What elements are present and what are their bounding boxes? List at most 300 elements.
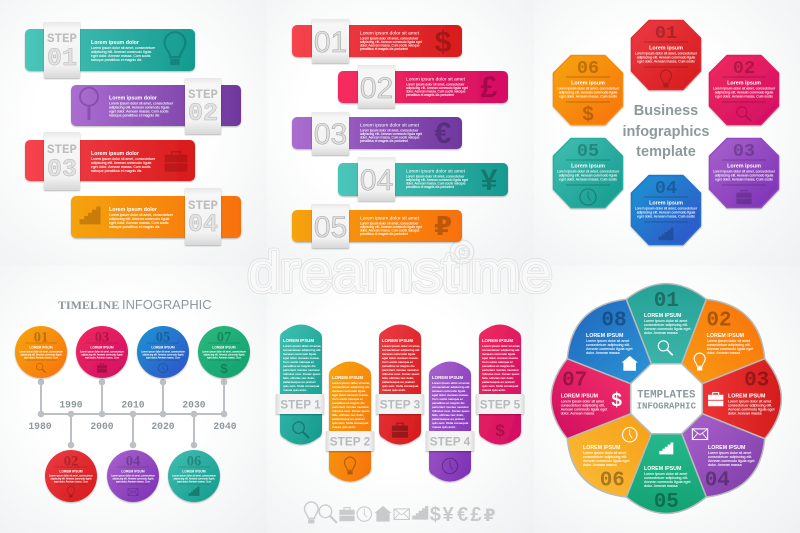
circle 05: 05 xyxy=(156,330,170,346)
segment 02 xyxy=(682,299,765,384)
segment 08: Aenean commodo ligula eget xyxy=(586,347,633,351)
octagon 03: eget dolor. Aenean massa. Cum sociis xyxy=(715,177,773,181)
octagon 04: 04 xyxy=(655,178,677,199)
pillar step 1: consectetuer adipiscing elit. xyxy=(283,348,321,352)
octagon 06: Lorem ipsum dolor sit amet, consectetuer xyxy=(557,86,620,90)
segment 07: dolor. Aenean massa xyxy=(561,412,594,416)
banner: 03 euro: € xyxy=(435,117,452,150)
banner: 01 dollar: penatibus et magnis dis parturient xyxy=(360,47,408,51)
pillar step 5: LOREM IPSUM xyxy=(482,338,513,343)
octagon 04: Lorem ipsum dolor sit amet, consectetuer xyxy=(635,206,698,210)
banner: 01 dollar: adipiscing elit. Aenean commodo ligula eget xyxy=(360,40,422,44)
octagon 03: Lorem ipsum xyxy=(727,164,761,170)
panel: step pillars xyxy=(276,324,524,526)
timeline axis xyxy=(38,379,227,448)
banner: step 2: STEP xyxy=(188,88,218,102)
title xyxy=(58,297,212,312)
segment 06: Aenean commodo ligula eget xyxy=(583,459,630,463)
octagon 06: 06 xyxy=(577,58,599,79)
octagon 02: Lorem ipsum dolor sit amet, consectetuer xyxy=(713,86,776,90)
segment 03: LOREM IPSUM xyxy=(728,394,766,400)
pillar step 5: penatibus et magnis dis xyxy=(482,364,515,368)
segment 06: 06 xyxy=(600,470,625,492)
segment 04: dolor. Aenean massa xyxy=(708,463,742,467)
banner: 02 pound: adipiscing elit. Aenean commodo ligula eget xyxy=(406,86,468,90)
pillar step 5: pellentesque eu pretium xyxy=(482,380,515,384)
segment 01: LOREM IPSUM xyxy=(644,313,682,319)
pillar step 1: Lorem ipsum dolor sit amet, xyxy=(283,344,321,348)
segment 02: Aenean commodo ligula eget xyxy=(707,347,753,351)
banner: 01 dollar: $ xyxy=(435,26,452,59)
banner: step 4: 04 xyxy=(188,210,218,239)
circle 06: adipiscing elit. Aenean commodo ligula xyxy=(173,478,215,480)
banner: 02 pound: Lorem ipsum dolor sit amet xyxy=(406,76,466,82)
banner: 04 yen: ¥ xyxy=(481,164,498,197)
circle 06: Lorem ipsum dolor sit amet, consectetuer xyxy=(172,474,216,478)
circle 04: LOREM IPSUM xyxy=(121,470,145,474)
segment 07: $ xyxy=(611,390,622,411)
segment 08: consectetuer adipiscing elit. xyxy=(586,343,630,347)
heading: business infographics template: infographics xyxy=(622,124,710,140)
pillar step 5: felis, ultricies nec dolor, xyxy=(482,376,514,380)
segment 06: Lorem ipsum dolor sit amet xyxy=(583,451,626,455)
pillar step 2: STEP 2 xyxy=(330,434,371,448)
year labels: 2010 xyxy=(121,400,145,410)
pillar step 4 xyxy=(426,362,474,482)
banner: 03 euro: dolor. Aenean massa. Cum sociis natoque xyxy=(360,136,420,140)
pillar step 4: Aenean commodo ligula xyxy=(432,389,465,393)
banner: step 3: STEP xyxy=(47,143,77,157)
segment 08: Lorem ipsum dolor sit amet xyxy=(586,339,629,343)
pillar step 5 xyxy=(476,324,524,444)
octagon 05: eget dolor. Aenean massa. Cum sociis xyxy=(559,177,617,181)
title: INFOGRAPHIC xyxy=(122,297,212,312)
pillar step 2: LOREM IPSUM xyxy=(332,375,363,380)
pillar step 2: Aenean commodo ligula xyxy=(332,389,365,393)
banner: step 2: 02 xyxy=(188,99,218,128)
segment 07 xyxy=(551,359,631,439)
banner: step 1: STEP xyxy=(47,32,77,46)
banner: 03 euro xyxy=(292,112,462,155)
year labels: 2040 xyxy=(213,421,237,432)
pillar step 5: quis sem. Nulla consequat xyxy=(482,384,518,388)
octagon 01: eget dolor. Aenean massa. Cum sociis xyxy=(637,59,695,63)
banner: 01 dollar xyxy=(292,19,462,63)
panel: circular templates infographic xyxy=(551,284,781,514)
octagon 06: Lorem ipsum xyxy=(571,80,605,86)
banner: 04 yen: Lorem ipsum dolor sit amet, consectetuer xyxy=(406,174,465,178)
banner: step 4 xyxy=(71,188,241,245)
banner: 03 euro: Lorem ipsum dolor sit amet xyxy=(360,122,420,128)
circle 06 xyxy=(168,450,220,502)
pillar step 5: consectetuer adipiscing elit. xyxy=(482,348,520,352)
pillar step 2: consectetuer adipiscing elit. xyxy=(332,385,370,389)
pillar step 4: ridiculus mus. Donec quam xyxy=(432,409,470,413)
segment 06: LOREM IPSUM xyxy=(583,445,621,451)
circle 07: Lorem ipsum dolor sit amet, consectetuer xyxy=(202,350,246,354)
pillar step 4: parturient montes nascetur xyxy=(432,405,469,409)
segment 06: dolor. Aenean massa xyxy=(583,463,617,467)
banner: step 3: Lorem ipsum dolor sit amet, consectetuer xyxy=(91,157,156,161)
octagon 05: adipiscing elit. Aenean commodo ligula xyxy=(559,173,617,177)
pillar step 3: Aenean commodo ligula xyxy=(382,352,415,356)
segment 07: consectetuer adipiscing elit. xyxy=(561,404,605,408)
banner: 01 dollar: Lorem ipsum dolor sit amet xyxy=(360,30,420,36)
segment 05: consectetuer adipiscing elit. xyxy=(644,476,688,480)
banner: step 1: adipiscing elit. Aenean commodo ligula xyxy=(91,50,151,54)
pillar step 1: eget dolor. Aenean massa. xyxy=(283,356,320,360)
circle 05: Lorem ipsum dolor sit amet, consectetuer xyxy=(141,350,185,354)
year labels: 2000 xyxy=(90,421,114,432)
banner: step 1 xyxy=(25,22,195,78)
octagon 03: Lorem ipsum dolor sit amet, consectetuer xyxy=(713,169,776,173)
segment 03: Lorem ipsum dolor sit amet xyxy=(728,400,771,404)
icon row: € xyxy=(457,504,468,526)
banner: step 3: eget dolor. Aenean massa. Cum sociis xyxy=(91,165,151,169)
banner: step 2 xyxy=(71,78,241,134)
circle 02: adipiscing elit. Aenean commodo ligula xyxy=(50,478,92,480)
pillar step 1: Cum sociis natoque et xyxy=(283,360,314,364)
circle 04 xyxy=(107,450,159,502)
circle 05: LOREM IPSUM xyxy=(151,346,175,350)
circle 02 xyxy=(45,450,97,502)
banner: 04 yen: penatibus et magnis dis parturient xyxy=(406,185,454,189)
year labels: 2030 xyxy=(182,400,206,410)
segment 07: Aenean commodo ligula eget xyxy=(561,408,607,412)
panel: step banners xyxy=(25,22,241,245)
banner: step 4: adipiscing elit. Aenean commodo ligula xyxy=(109,217,169,221)
banner: 02 pound: dolor. Aenean massa. Cum sociis natoque xyxy=(406,90,466,94)
pillar step 4: Lorem ipsum dolor sit amet, xyxy=(432,381,470,385)
circle 04: adipiscing elit. Aenean commodo ligula xyxy=(112,478,154,480)
pillar step 5: massa quis enim. xyxy=(482,388,506,392)
pillar step 1: parturient montes nascetur xyxy=(283,368,320,372)
circle 01: adipiscing elit. Aenean commodo ligula xyxy=(20,354,62,356)
banner: 03 euro: 03 xyxy=(314,118,347,151)
segment 04: Aenean commodo ligula eget xyxy=(708,459,755,463)
octagon 05: Lorem ipsum xyxy=(571,164,605,170)
pillar step 3 xyxy=(376,324,424,444)
circle 05 xyxy=(137,326,189,378)
segment 08: 08 xyxy=(601,310,627,332)
circle 04: eget dolor. Aenean massa. Cum xyxy=(116,480,150,484)
octagon 01: 01 xyxy=(655,23,677,44)
panel: currency banners xyxy=(292,19,508,248)
segment 03: Aenean commodo ligula eget xyxy=(728,408,775,412)
circle 07: $ xyxy=(220,361,228,376)
pillar step 4: eget dolor. Aenean massa. xyxy=(432,393,469,397)
banner: 03 euro: Lorem ipsum dolor sit amet, consectetuer xyxy=(360,128,419,132)
segment 08: dolor. Aenean massa xyxy=(586,351,620,355)
pillar step 2: felis, ultricies nec dolor, xyxy=(332,413,364,417)
pillar step 3: eget dolor. Aenean massa. xyxy=(382,356,419,360)
pillar step 3: penatibus et magnis dis xyxy=(382,364,415,368)
pillar step 1: LOREM IPSUM xyxy=(283,338,314,343)
pillar step 3: Cum sociis natoque et xyxy=(382,360,413,364)
pillar step 2 xyxy=(326,362,374,482)
circle 05: adipiscing elit. Aenean commodo ligula xyxy=(142,354,184,356)
banner: step 1: 01 xyxy=(47,44,77,73)
banner: step 3: Lorem ipsum dolor xyxy=(91,151,139,157)
circle 03: Lorem ipsum dolor sit amet, consectetuer xyxy=(80,350,124,354)
pillar step 5: ridiculus mus. Donec quam xyxy=(482,372,520,376)
segment 04: Lorem ipsum dolor sit amet xyxy=(708,451,751,455)
octagon 06: eget dolor. Aenean massa. Cum sociis xyxy=(559,94,617,98)
circle 05: eget dolor. Aenean massa. Cum xyxy=(146,356,180,360)
circle 06: LOREM IPSUM xyxy=(182,470,206,474)
banner: step 2: eget dolor. Aenean massa. Cum sociis xyxy=(109,110,169,114)
segment 05: Lorem ipsum dolor sit amet xyxy=(644,472,687,476)
watermark: dreamstime xyxy=(248,240,552,303)
pillar step 3: consectetuer adipiscing elit. xyxy=(382,348,420,352)
circle 02: eget dolor. Aenean massa. Cum xyxy=(54,480,88,484)
octagon 02: Lorem ipsum xyxy=(727,80,761,86)
year labels: 1990 xyxy=(59,400,83,410)
octagon 03: 03 xyxy=(733,141,755,162)
segment 05: LOREM IPSUM xyxy=(644,466,682,472)
segment 01: Aenean commodo ligula eget xyxy=(644,327,691,331)
octagon 05 xyxy=(554,138,622,208)
icon row: ¥ xyxy=(442,504,454,526)
circle 03: 03 xyxy=(95,330,109,346)
segment 03: dolor. Aenean massa xyxy=(728,412,762,416)
banner: step 3: natoque penatibus et magnis dis xyxy=(91,169,142,173)
icon row: £ xyxy=(470,504,482,526)
banner: 04 yen xyxy=(338,157,508,201)
banner: 04 yen: dolor. Aenean massa. Cum sociis natoque xyxy=(406,182,466,186)
segment 05 xyxy=(626,434,706,514)
banner: 05 ruble: 05 xyxy=(314,211,347,244)
pillar step 3: massa quis enim. xyxy=(382,388,406,392)
pillar step 4: pellentesque eu pretium xyxy=(432,417,465,421)
segment 02: 02 xyxy=(706,310,732,332)
pillar step 1: felis, ultricies nec dolor, xyxy=(283,376,315,380)
year labels: 2020 xyxy=(151,421,175,432)
octagon 06: $ xyxy=(582,104,594,126)
pillar step 3: ridiculus mus. Donec quam xyxy=(382,372,420,376)
octagon 02 xyxy=(710,56,778,124)
banner: step 2: Lorem ipsum dolor xyxy=(109,96,157,102)
pillar step 2: massa quis enim. xyxy=(332,425,356,429)
pillar step 5: parturient montes nascetur xyxy=(482,368,519,372)
watermark: dreamstime xyxy=(248,240,552,303)
banner: 05 ruble: adipiscing elit. Aenean commodo ligula eget xyxy=(360,225,422,229)
octagon 02: eget dolor. Aenean massa. Cum sociis xyxy=(715,94,773,98)
circle 03 xyxy=(76,326,128,378)
icon row: ₽ xyxy=(484,506,496,526)
banner: 01 dollar: 01 xyxy=(314,26,347,59)
pillar step 1: massa quis enim. xyxy=(283,388,307,392)
circle 01: eget dolor. Aenean massa. Cum xyxy=(24,356,58,360)
icon row: $ xyxy=(430,504,441,526)
watermark: dreamstime xyxy=(248,240,552,303)
pillar step 5: $ xyxy=(495,421,505,440)
title: TIMELINE xyxy=(58,298,119,312)
panel: octagon infographic xyxy=(554,20,778,244)
circle 01 xyxy=(15,326,67,378)
pillar step 4: massa quis enim. xyxy=(432,425,456,429)
circle 04: 04 xyxy=(126,454,140,470)
pillar step 1 xyxy=(276,324,324,444)
circle 03: eget dolor. Aenean massa. Cum xyxy=(85,356,119,360)
pillar step 3: LOREM IPSUM xyxy=(382,338,413,343)
circle 01: 01 xyxy=(34,330,48,346)
segment 06 xyxy=(567,414,651,497)
pillar step 1: Aenean commodo ligula xyxy=(283,352,316,356)
banner: 02 pound: Lorem ipsum dolor sit amet, consectetuer xyxy=(406,82,465,86)
banner: 04 yen: Lorem ipsum dolor sit amet xyxy=(406,168,466,174)
pillar step 2: penatibus et magnis dis xyxy=(332,401,365,405)
pillar step 3: felis, ultricies nec dolor, xyxy=(382,376,414,380)
octagon 04: eget dolor. Aenean massa. Cum sociis xyxy=(637,214,695,218)
segment 07: Lorem ipsum dolor sit amet xyxy=(561,400,604,404)
pillar step 2: pellentesque eu pretium xyxy=(332,417,365,421)
octagon 03: adipiscing elit. Aenean commodo ligula xyxy=(715,173,773,177)
center octagon heading: INFOGRAPHIC xyxy=(637,402,697,412)
pillar step 2: quis sem. Nulla consequat xyxy=(332,421,368,425)
banner: 04 yen: adipiscing elit. Aenean commodo ligula eget xyxy=(406,178,468,182)
segment 04: LOREM IPSUM xyxy=(708,445,746,451)
panel: timeline xyxy=(15,297,250,502)
circle 01: LOREM IPSUM xyxy=(29,346,53,350)
banner: step 4: natoque penatibus et magnis dis xyxy=(109,225,160,229)
banner: step 2: adipiscing elit. Aenean commodo ligula xyxy=(109,106,169,110)
circle 01: Lorem ipsum dolor sit amet, consectetuer xyxy=(19,350,63,354)
octagon 03 xyxy=(710,138,778,208)
heading: business infographics template xyxy=(622,103,710,160)
pillar step 1: quis sem. Nulla consequat xyxy=(283,384,319,388)
segment 04: consectetuer adipiscing elit. xyxy=(708,455,752,459)
pillar step 1: ridiculus mus. Donec quam xyxy=(283,372,321,376)
banner: step 1: Lorem ipsum dolor xyxy=(91,40,139,46)
banner: 02 pound: 02 xyxy=(360,72,393,105)
pillar step 2: Lorem ipsum dolor sit amet, xyxy=(332,381,370,385)
pillar step 4: STEP 4 xyxy=(430,434,471,448)
pillar step 2: parturient montes nascetur xyxy=(332,405,369,409)
banner: 05 ruble: dolor. Aenean massa. Cum sociis natoque xyxy=(360,228,420,232)
pillar step 4: quis sem. Nulla consequat xyxy=(432,421,468,425)
octagon 02: 02 xyxy=(733,58,755,79)
pillar step 2: eget dolor. Aenean massa. xyxy=(332,393,369,397)
circle 02: LOREM IPSUM xyxy=(59,470,83,474)
octagon 01: adipiscing elit. Aenean commodo ligula xyxy=(637,55,695,59)
segment 05: 05 xyxy=(654,491,679,514)
circle 06: eget dolor. Aenean massa. Cum xyxy=(177,480,211,484)
banner: 03 euro: penatibus et magnis dis parturient xyxy=(360,139,408,143)
pillar step 3: STEP 3 xyxy=(380,398,421,412)
segment 01 xyxy=(626,284,706,364)
pillar step 3: Lorem ipsum dolor sit amet, xyxy=(382,344,420,348)
pillar step 4: felis, ultricies nec dolor, xyxy=(432,413,464,417)
center octagon heading: TEMPLATES xyxy=(637,390,696,402)
banner: step 1: natoque penatibus et magnis dis xyxy=(91,58,142,62)
year labels: 1980 xyxy=(28,421,52,432)
segment 01: dolor. Aenean massa xyxy=(644,331,678,335)
circle 02: Lorem ipsum dolor sit amet, consectetuer xyxy=(49,474,93,478)
segment 05: Aenean commodo ligula eget xyxy=(644,480,691,484)
octagon 05: 05 xyxy=(577,141,599,162)
banner: step 4: eget dolor. Aenean massa. Cum sociis xyxy=(109,221,169,225)
segment 01: Lorem ipsum dolor sit amet xyxy=(644,319,687,323)
segment 08 xyxy=(567,299,651,384)
banner: step 4: Lorem ipsum dolor sit amet, consectetuer xyxy=(109,213,174,217)
segment 01: consectetuer adipiscing elit. xyxy=(644,323,688,327)
octagon 04: Lorem ipsum xyxy=(649,200,683,206)
segment 03: 03 xyxy=(744,370,769,392)
banner: 02 pound: £ xyxy=(481,71,498,104)
banner: step 1: eget dolor. Aenean massa. Cum sociis xyxy=(91,54,151,58)
octagon 05: Lorem ipsum dolor sit amet, consectetuer xyxy=(557,169,620,173)
segment 02: LOREM IPSUM xyxy=(707,333,745,339)
pillar step 2: ridiculus mus. Donec quam xyxy=(332,409,370,413)
circle 06: 06 xyxy=(187,454,201,470)
segment 01: 01 xyxy=(654,290,679,313)
circle 07: LOREM IPSUM xyxy=(212,346,236,350)
octagon 01: Lorem ipsum dolor sit amet, consectetuer xyxy=(635,51,698,55)
banner: step 1: Lorem ipsum dolor sit amet, consectetuer xyxy=(91,46,156,50)
pillar step 5: eget dolor. Aenean massa. xyxy=(482,356,519,360)
octagon 02: adipiscing elit. Aenean commodo ligula xyxy=(715,90,773,94)
icon row xyxy=(304,502,496,526)
octagon 06: adipiscing elit. Aenean commodo ligula xyxy=(559,90,617,94)
circle 07 xyxy=(198,326,250,378)
segment 03 xyxy=(702,359,781,439)
pillar step 5: Lorem ipsum dolor sit amet, xyxy=(482,344,520,348)
segment 03: consectetuer adipiscing elit. xyxy=(728,404,772,408)
octagon 01 xyxy=(632,20,700,90)
banner: step 3: adipiscing elit. Aenean commodo ligula xyxy=(91,161,151,165)
circle 04: Lorem ipsum dolor sit amet, consectetuer xyxy=(111,474,155,478)
banner: 02 pound xyxy=(338,65,508,108)
segment 07: 07 xyxy=(562,370,587,392)
segment 04 xyxy=(682,414,765,497)
pillar step 5: Aenean commodo ligula xyxy=(482,352,515,356)
pillar step 5: STEP 5 xyxy=(480,398,521,412)
banner: step 2: Lorem ipsum dolor sit amet, consectetuer xyxy=(109,102,174,106)
octagon 06 xyxy=(554,56,622,126)
segment 07: LOREM IPSUM xyxy=(561,394,599,400)
circle 03: LOREM IPSUM xyxy=(90,346,114,350)
pillar step 4: consectetuer adipiscing elit. xyxy=(432,385,470,389)
banner: 01 dollar: Lorem ipsum dolor sit amet, consectetuer xyxy=(360,36,419,40)
segment 02: Lorem ipsum dolor sit amet xyxy=(707,339,750,343)
banner: step 3: 03 xyxy=(47,155,77,184)
segment 02: dolor. Aenean massa xyxy=(707,351,740,355)
pillar step 2: Cum sociis natoque et xyxy=(332,397,363,401)
pillar step 4: penatibus et magnis dis xyxy=(432,401,465,405)
center octagon heading xyxy=(631,364,702,434)
circle 07: eget dolor. Aenean massa. Cum xyxy=(207,356,241,360)
pillar step 4: LOREM IPSUM xyxy=(432,375,463,380)
pillar step 5: Cum sociis natoque et xyxy=(482,360,513,364)
banner: 02 pound: penatibus et magnis dis parturient xyxy=(406,93,454,97)
pillar step 3: quis sem. Nulla consequat xyxy=(382,384,418,388)
circle 07: 07 xyxy=(217,330,231,346)
pillar step 1: STEP 1 xyxy=(280,398,321,412)
banner: 03 euro: adipiscing elit. Aenean commodo ligula eget xyxy=(360,132,422,136)
banner: step 2: natoque penatibus et magnis dis xyxy=(109,114,160,118)
octagon 04: adipiscing elit. Aenean commodo ligula xyxy=(637,210,695,214)
pillar step 3: parturient montes nascetur xyxy=(382,368,419,372)
banner: 05 ruble: Lorem ipsum dolor sit amet, consectetuer xyxy=(360,222,419,226)
segment 04: 04 xyxy=(705,470,730,492)
segment 05: dolor. Aenean massa xyxy=(644,484,678,488)
heading: business infographics template: Business xyxy=(634,103,698,119)
banner: step 4: Lorem ipsum dolor xyxy=(109,207,157,213)
banner: 05 ruble: penatibus et magnis dis parturient xyxy=(360,232,408,236)
pillar step 3: pellentesque eu pretium xyxy=(382,380,415,384)
banner: step 4: STEP xyxy=(188,199,218,213)
